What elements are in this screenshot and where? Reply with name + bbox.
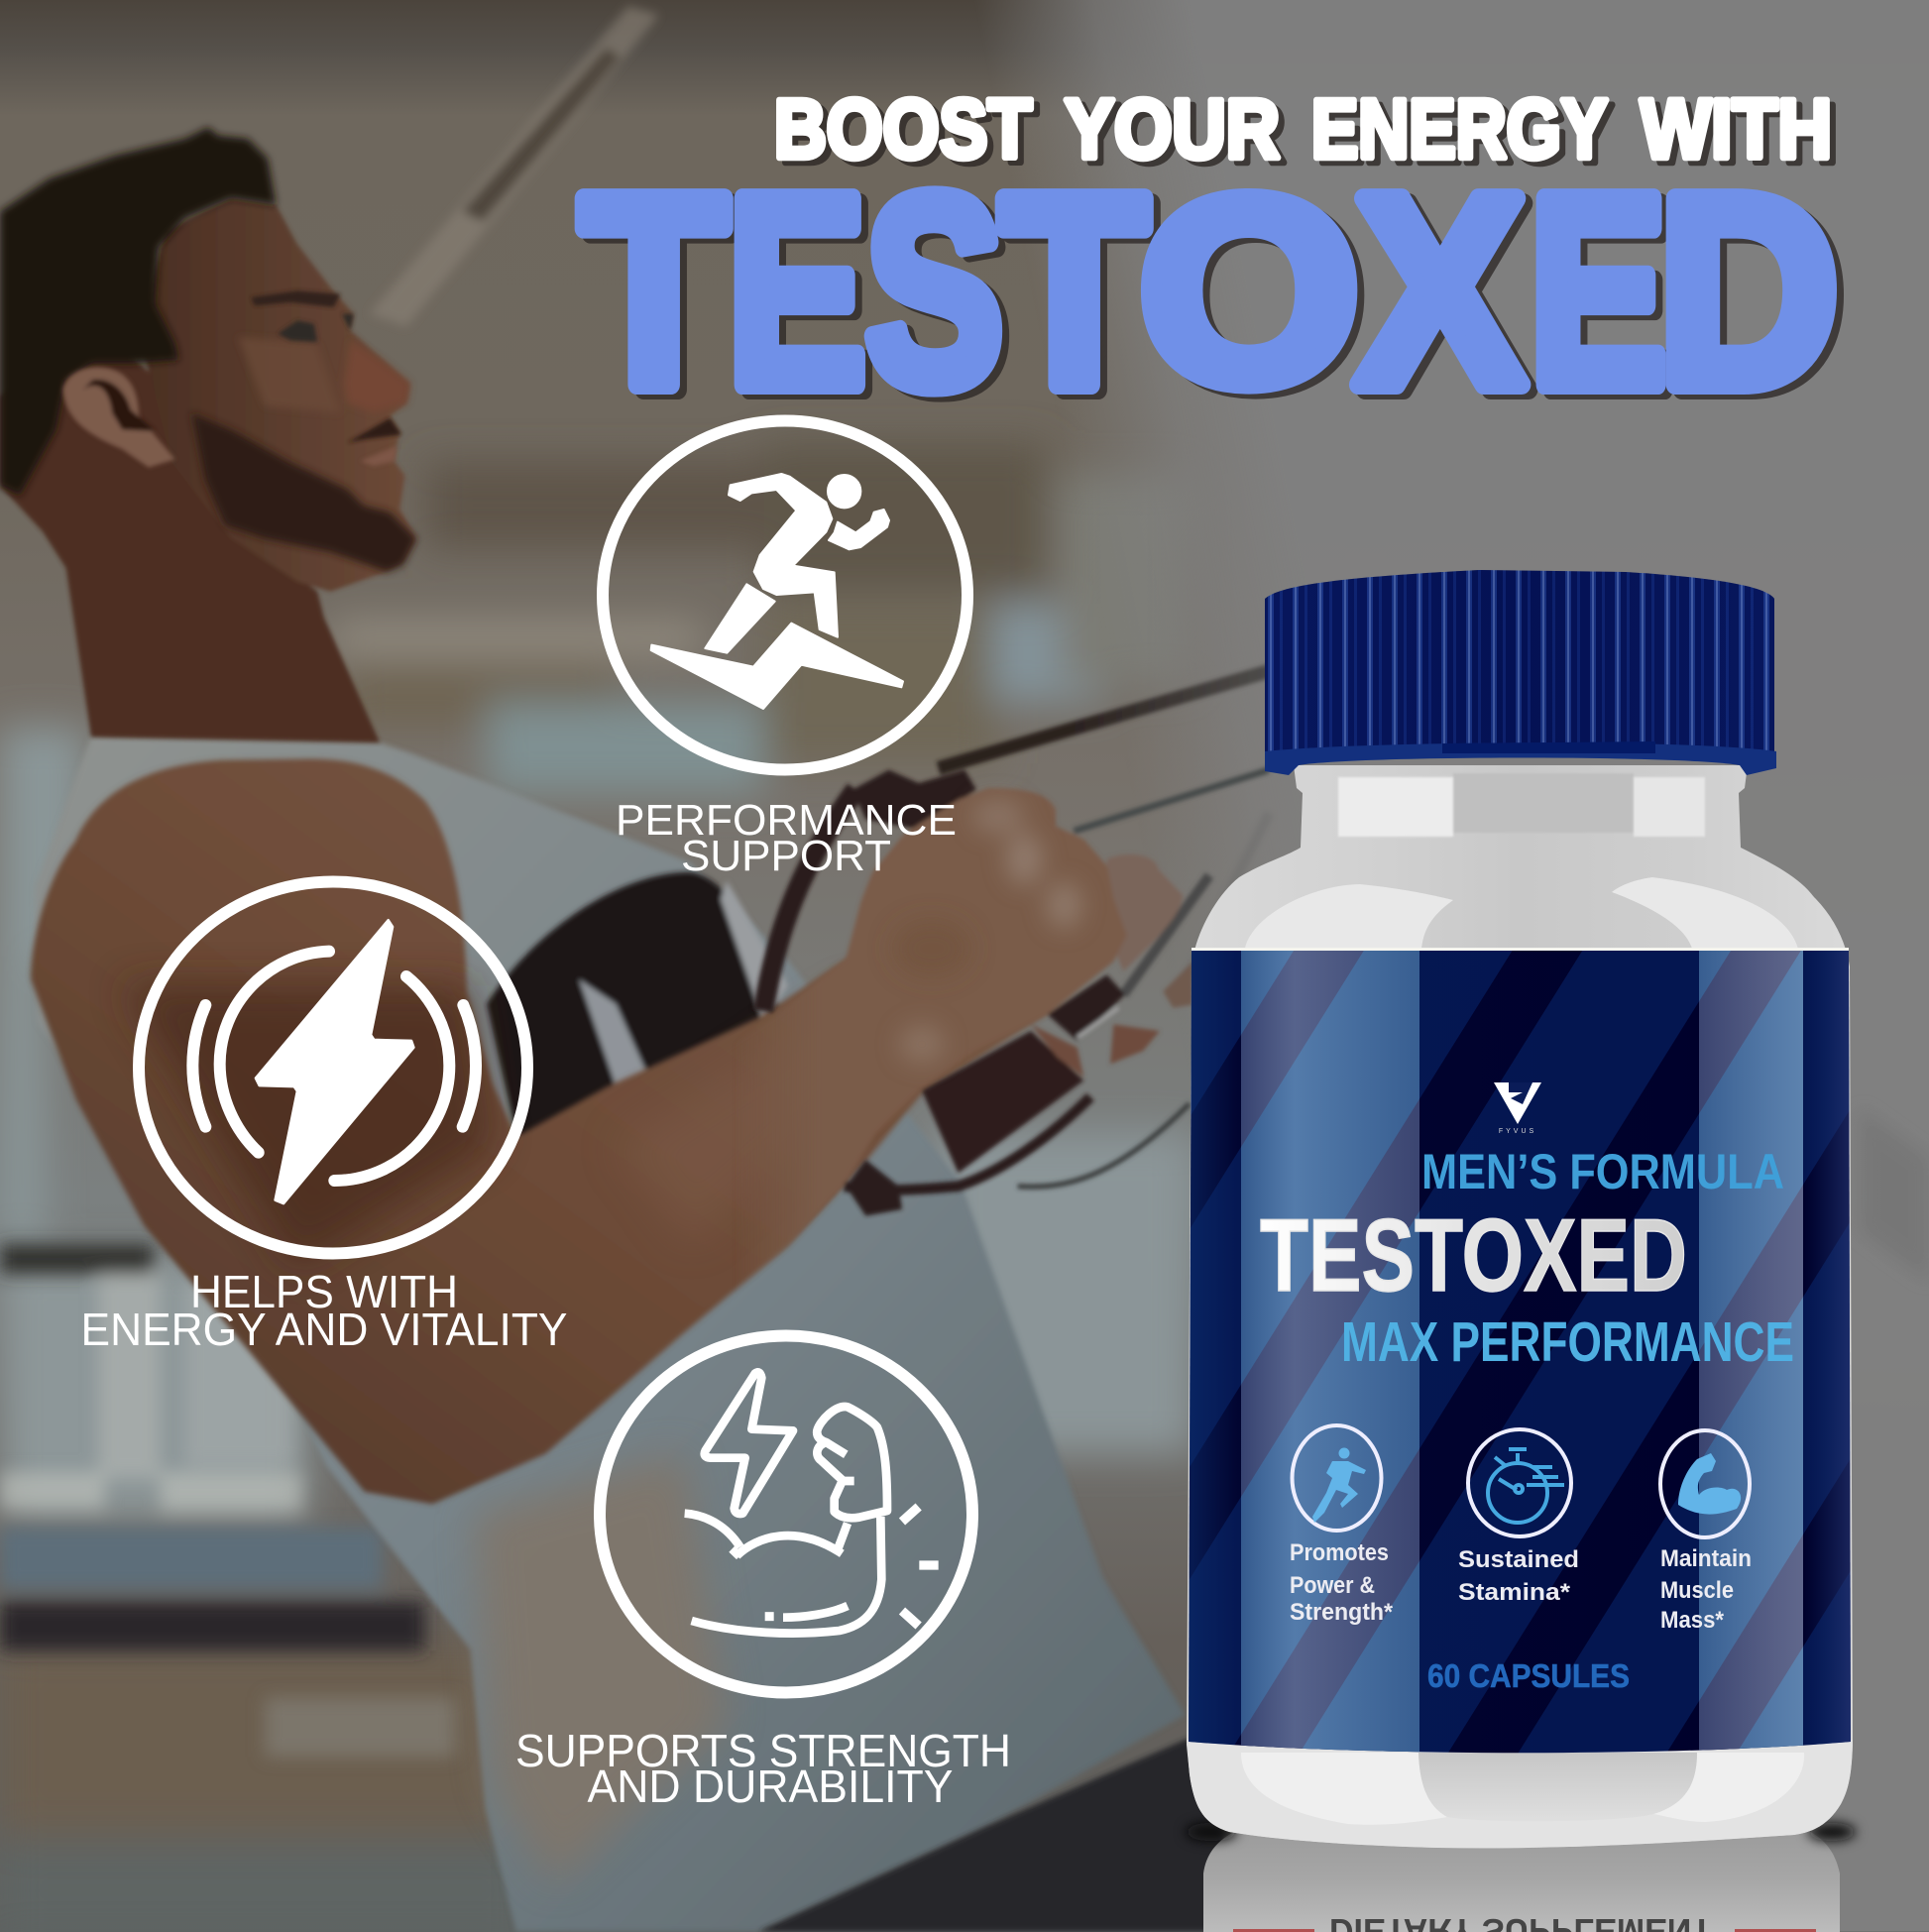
heading: boost your energy with: ENERGY [1311,82,1608,175]
neck highlight [1338,773,1705,837]
product text [1260,1144,1794,1374]
benefit captions: Power & [1290,1572,1375,1599]
benefit icon: power [1293,1425,1382,1531]
bottle cap [1265,570,1776,775]
label: HELPS WITH [190,1266,458,1317]
heading: TESTOXED: O [1140,145,1359,438]
benefit captions: Maintain [1660,1545,1752,1572]
heading: TESTOXED: S [865,142,1003,443]
label: SUPPORTS STRENGTH [515,1725,1011,1776]
benefit captions: Promotes [1290,1539,1389,1566]
brand logo [1494,1082,1541,1135]
upper arm and forearm [31,758,1047,1504]
heading: TESTOXED: E [728,140,866,442]
product bottle [1186,570,1856,1932]
heading: boost your energy with: YOUR [1065,82,1280,175]
heading: TESTOXED [581,139,1838,443]
heading: TESTOXED: E [1530,141,1666,443]
label: AND DURABILITY [587,1761,954,1812]
heading: boost your energy with: BOOST [774,82,1032,175]
headline [581,82,1838,443]
black sleeve [487,872,788,1139]
label: SUPPORT [681,832,891,880]
brand logo: FYVUS [1499,1128,1536,1135]
label [515,1725,1011,1812]
capsule count: 60 CAPSULES [1427,1657,1630,1694]
ceiling beam [370,6,659,326]
icon: runner in circle [603,420,967,769]
benefit captions: Stamina* [1458,1579,1571,1606]
benefit captions: Sustained [1458,1546,1579,1573]
heading: TESTOXED: T [581,140,728,442]
shirt [35,737,1185,1932]
product text: MAX PERFORMANCE [1341,1310,1794,1374]
bottle label [1189,942,1853,1764]
heading: TESTOXED: T [1001,140,1148,442]
benefit captions: Strength* [1290,1599,1394,1626]
blurred gym interior [0,443,1194,1932]
heading: TESTOXED: D [1658,140,1838,442]
icon: flexed arm and bolt in circle [600,1336,972,1693]
shoulder highlights [1245,884,1453,949]
benefit captions: Muscle [1660,1577,1734,1604]
label [81,1266,567,1355]
feature: energy and vitality [81,882,567,1355]
hand, straps and handle [734,671,1269,1294]
icon: lightning bolt in circle [139,882,527,1253]
bottle body [1187,765,1853,1848]
bottom base [1187,1740,1853,1848]
bottom highlight [1241,1753,1447,1825]
heading: TESTOXED: X [1356,139,1526,442]
pants [759,1738,1257,1932]
label [616,796,957,880]
product text: TESTOXED [1260,1198,1687,1313]
heading: boost your energy with [774,82,1832,175]
reflection on the floor [1186,1823,1856,1932]
heading: boost your energy with: WITH [1641,82,1832,175]
benefit icon: stamina [1468,1429,1571,1536]
label: ENERGY AND VITALITY [81,1304,567,1355]
man's head [0,127,416,742]
product text: MEN’S FORMULA [1421,1144,1784,1199]
label: PERFORMANCE [616,796,957,845]
right gray fade [862,0,1929,1932]
feature: strength and durability [515,1336,1011,1812]
benefit captions: Mass* [1660,1607,1725,1634]
bottom centre shade [1418,1753,1697,1821]
feature: performance support [603,420,967,880]
benefit captions [1290,1539,1752,1634]
benefit icon: muscle [1660,1430,1750,1537]
